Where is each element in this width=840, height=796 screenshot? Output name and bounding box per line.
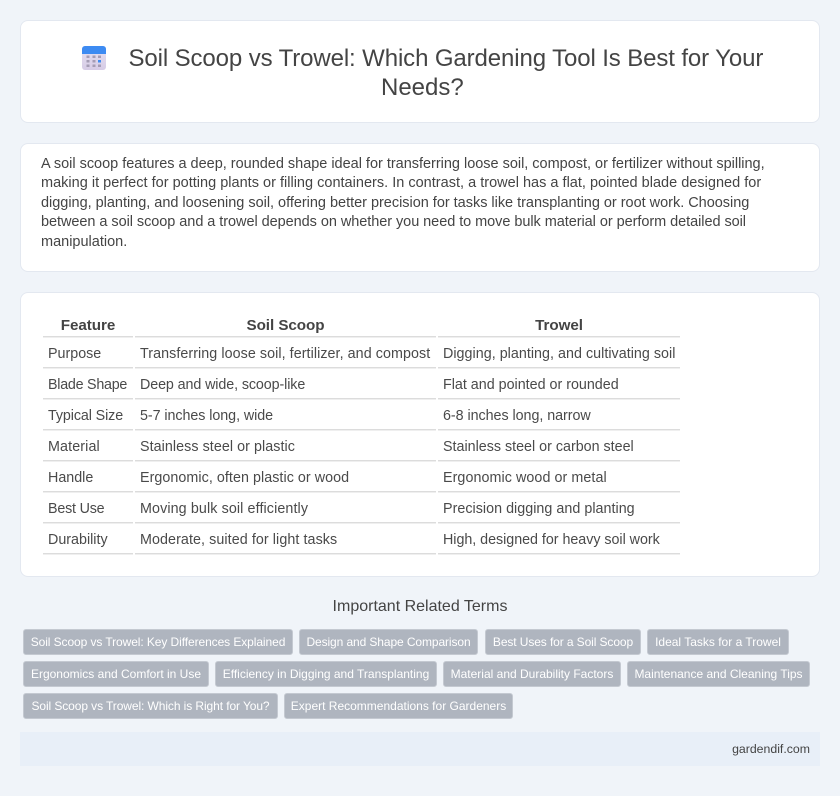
comparison table: Flat and pointed or rounded (443, 377, 619, 393)
related term chips (23, 629, 810, 719)
comparison table: Durability (48, 532, 108, 548)
comparison table: Soil Scoop (246, 317, 324, 334)
related term chips: Maintenance and Cleaning Tips (634, 667, 803, 681)
panel: description (20, 143, 820, 272)
comparison table: Feature (61, 317, 115, 334)
related term chips: Ideal Tasks for a Trowel (655, 635, 781, 649)
comparison table (43, 317, 680, 555)
header panel (20, 20, 820, 123)
comparison table: Blade Shape (48, 377, 127, 393)
text block: description: manipulation. (41, 234, 127, 250)
text block: description: between a soil scoop and a trowel depends on whether you need to move bulk material or perform detailed soil (41, 214, 746, 230)
footer (20, 732, 820, 766)
text block: description: digging, planting, and loosening soil, offering better precision for tasks like transplanting or root work. Choosing (41, 195, 749, 211)
comparison table: 5-7 inches long, wide (140, 408, 273, 424)
icon: calendar (82, 46, 106, 70)
related term chips: Soil Scoop vs Trowel: Which is Right for You? (31, 699, 270, 713)
footer source text: gardendif.com (732, 742, 810, 756)
comparison table: Purpose (48, 346, 101, 362)
text block: description (41, 156, 765, 250)
comparison table: Moving bulk soil efficiently (140, 501, 308, 517)
comparison table: Transferring loose soil, fertilizer, and compost (140, 346, 430, 362)
related term chips: Ergonomics and Comfort in Use (31, 667, 201, 681)
related term chips: Material and Durability Factors (451, 667, 613, 681)
related term chips: Expert Recommendations for Gardeners (291, 699, 506, 713)
comparison table: Digging, planting, and cultivating soil (443, 346, 675, 362)
comparison table: Ergonomic wood or metal (443, 470, 607, 486)
comparison table: 6-8 inches long, narrow (443, 408, 591, 424)
comparison table: Deep and wide, scoop-like (140, 377, 305, 393)
related term chips: Soil Scoop vs Trowel: Key Differences Explained (31, 635, 285, 649)
text block: description: making it perfect for potting plants or filling containers. In contrast, a trowel has a flat, pointed blade designed for (41, 175, 761, 191)
comparison table: Moderate, suited for light tasks (140, 532, 337, 548)
comparison table: Material (48, 439, 100, 455)
comparison table: Stainless steel or plastic (140, 439, 295, 455)
related term chips: Design and Shape Comparison (306, 635, 471, 649)
panel: comparison table (20, 292, 820, 577)
text block: description: A soil scoop features a deep, rounded shape ideal for transferring loose soil, compost, or fertilizer without spilling, (41, 156, 765, 172)
title (128, 45, 763, 101)
comparison table: Typical Size (48, 408, 123, 424)
comparison table: Ergonomic, often plastic or wood (140, 470, 349, 486)
related term chips: Best Uses for a Soil Scoop (493, 635, 633, 649)
related term chips: Efficiency in Digging and Transplanting (223, 667, 429, 681)
title: Soil Scoop vs Trowel: Which Gardening Tool Is Best for Your (128, 45, 763, 72)
title: Needs? (381, 74, 464, 101)
comparison table: Precision digging and planting (443, 501, 635, 517)
comparison table: Handle (48, 470, 93, 486)
comparison table: Best Use (48, 501, 104, 517)
comparison table: Trowel (535, 317, 583, 334)
comparison table: High, designed for heavy soil work (443, 532, 660, 548)
heading: related terms: Important Related Terms (333, 598, 507, 615)
comparison table: Stainless steel or carbon steel (443, 439, 634, 455)
